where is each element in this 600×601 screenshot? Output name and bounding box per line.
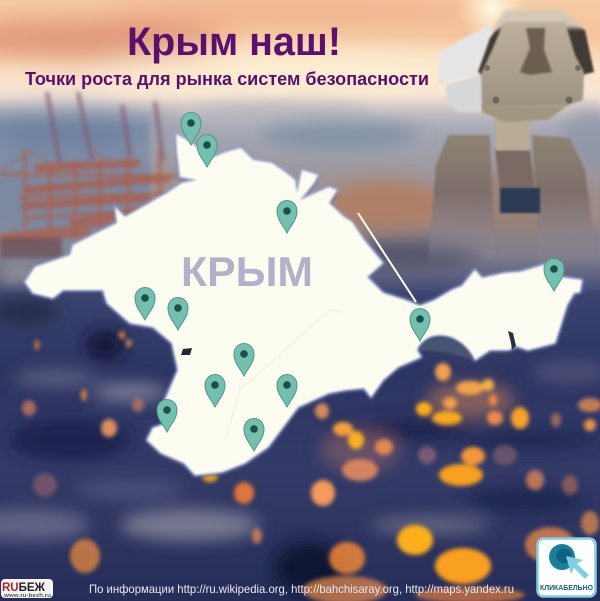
logo: Klikabelno: [538, 538, 596, 596]
location pins: [135, 112, 564, 451]
logo: RUBEZH: www.ru-bezh.ru: [3, 593, 51, 599]
hazy city band: [150, 90, 600, 270]
sunset sky glow: [0, 0, 500, 240]
map label: КРЫМ: [181, 248, 313, 295]
source note: По информации http://ru.wikipedia.org, http://bahchisaray.org, http://maps.yandex.ru: [89, 582, 514, 596]
title: Крым наш!: [127, 20, 341, 64]
camera base: [428, 135, 495, 262]
bokeh lights: [22, 331, 600, 601]
logo: RUBEZH: RUБЕЖ: [2, 582, 46, 594]
camera face: [481, 22, 584, 108]
security camera: [428, 10, 597, 262]
camera hood: [438, 24, 500, 85]
camera latch: [520, 28, 552, 75]
Arabat spit: [358, 213, 416, 302]
port cranes: [0, 92, 178, 258]
subtitle: Точки роста для рынка систем безопасности: [25, 69, 429, 89]
logo: RUBEZH: [1, 579, 53, 599]
dark stones and water blur: [0, 298, 600, 594]
map of Crimea: [25, 134, 582, 478]
logo: Klikabelno: КЛИКАБЕЛЬНО: [540, 585, 594, 592]
camera neck: [494, 115, 530, 150]
